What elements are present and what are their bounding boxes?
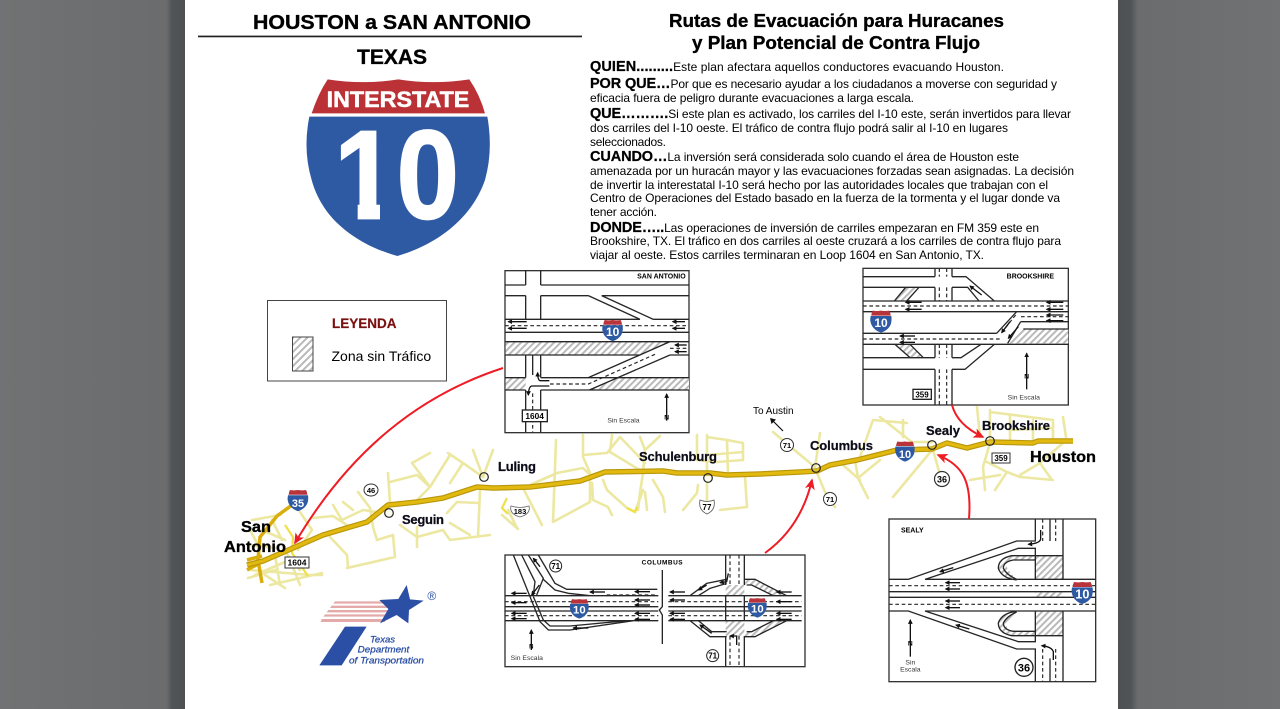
I-35 shield: [288, 490, 308, 511]
text block: quien, por que, que, cuando, donde: dos carriles del I-10 oeste. El tráfico de contra flujo podrá salir al I-10 en lugares: [590, 121, 1008, 135]
city labels: Houston: [1030, 449, 1096, 466]
city labels: Seguin: [402, 512, 444, 527]
text block: quien, por que, que, cuando, donde: CUANDO…La inversión será considerada solo cuando el área de Houston este: [590, 149, 1019, 165]
panel: Sealy detail: 36: [1018, 662, 1030, 674]
text block: quien, por que, que, cuando, donde: DONDE…..Las operaciones de inversión de carriles empezaran en FM 359 este en: [590, 220, 1039, 236]
viewer background left: [0, 0, 185, 709]
panel: San Antonio detail: N: [664, 414, 669, 421]
document page: [185, 0, 1118, 709]
logo: Texas Department of Transportation: ®: [427, 589, 436, 603]
panel: Columbus detail: 71: [551, 562, 561, 571]
city labels: Antonio: [224, 539, 286, 556]
route badges: 1604: [288, 558, 307, 568]
text block: quien, por que, que, cuando, donde: de invertir la interestatal I-10 será hecho por las autoridades locales que trabajan con el: [590, 178, 1048, 192]
city labels: Brookshire: [982, 418, 1050, 433]
arrow: to San Antonio detail: [295, 368, 503, 543]
logo: Texas Department of Transportation: Department: [358, 644, 410, 654]
city markers: [385, 437, 994, 517]
panel: Sealy detail: 10: [1075, 587, 1089, 601]
panel: San Antonio detail: 10: [606, 325, 620, 339]
panel: Sealy detail: [889, 519, 1096, 682]
city labels: Schulenburg: [639, 449, 717, 464]
panel: Columbus detail: COLUMBUS: [642, 559, 683, 566]
text block: quien, por que, que, cuando, donde: seleccionados.: [590, 135, 666, 149]
text block: quien, por que, que, cuando, donde: POR QUE…Por que es necesario ayudar a los ciudadanos a moverse con seguridad y: [590, 76, 1057, 92]
panel: San Antonio detail: Sin Escala: [607, 417, 640, 424]
to Austin label: To Austin: [753, 406, 794, 417]
route badges: 36: [937, 474, 947, 484]
I-10 shield on map: [895, 442, 915, 462]
panel: Columbus detail: Sin Escala: [511, 655, 543, 662]
heading: Rutas de Evacuacion: [669, 10, 1004, 53]
panel: San Antonio detail: SAN ANTONIO: [637, 273, 686, 280]
legend: LEYENDA: [332, 316, 397, 331]
panel: San Antonio detail: [505, 271, 689, 433]
panel: Columbus detail: 10: [573, 605, 586, 617]
panel: Sealy detail: SEALY: [901, 527, 924, 534]
text block: quien, por que, que, cuando, donde: QUIEN.........Este plan afectara aquellos conductores evacuando Houston.: [590, 59, 1004, 75]
text block: quien, por que, que, cuando, donde: tener acción.: [590, 205, 657, 219]
panel: San Antonio detail: 1604: [525, 411, 544, 421]
icon: Interstate 10 shield: 10: [334, 103, 459, 245]
route badges: 77: [703, 503, 712, 512]
legend: Zona sin Tráfico: [332, 348, 431, 364]
route badges: 359: [994, 454, 1008, 463]
side roads: [248, 407, 1066, 588]
panel: Columbus detail: N: [529, 644, 533, 650]
arrow: to Sealy detail: [938, 455, 970, 519]
heading: Rutas de Evacuacion: Rutas de Evacuación para Huracanes: [669, 10, 1004, 31]
panel: Brookshire detail: Sin Escala: [1008, 394, 1040, 401]
panel: Columbus detail: 71: [708, 652, 718, 661]
I-10 shield on map: 10: [899, 449, 911, 461]
I-35 shield: 35: [292, 498, 304, 510]
icon: Interstate 10 shield: INTERSTATE: [327, 87, 469, 112]
text block: quien, por que, que, cuando, donde: Centro de Operaciones del Estado basado en la fuerza de la tormenta y el lugar donde va: [590, 191, 1060, 205]
text block: quien, por que, que, cuando, donde: QUE……….Si este plan es activado, los carriles del I-10 este, serán invertidos para llevar: [590, 106, 1071, 122]
viewer background right: [1118, 0, 1280, 709]
heading: Houston a San Antonio: TEXAS: [357, 46, 427, 69]
heading: Rutas de Evacuacion: y Plan Potencial de Contra Flujo: [692, 32, 980, 53]
text block: quien, por que, que, cuando, donde: eficacia fuera de peligro durante evacuaciones a larga escala.: [590, 91, 914, 105]
heading: Houston a San Antonio: HOUSTON a SAN ANTONIO: [253, 12, 531, 34]
city labels: [224, 418, 1096, 556]
city labels: Sealy: [926, 423, 961, 438]
panel: Columbus detail: 10: [751, 604, 764, 616]
logo: Texas Department of Transportation: Texas: [370, 634, 395, 644]
panel: Sealy detail: N: [908, 640, 913, 647]
I-10 main route: [247, 441, 1073, 565]
city labels: Columbus: [810, 438, 873, 453]
route badges: 183: [514, 507, 526, 516]
panel: Sealy detail: Sin: [905, 660, 915, 667]
panel: Sealy detail: Escala: [900, 667, 921, 674]
panel: Brookshire detail: N: [1024, 374, 1029, 381]
panel: Columbus detail: [505, 555, 805, 667]
route badges: 71: [826, 495, 834, 504]
route badges: 46: [367, 486, 375, 495]
to Austin label: [753, 406, 794, 431]
heading: Houston a San Antonio: [198, 12, 582, 69]
icon: Interstate 10 shield: [306, 79, 490, 256]
arrow: to Brookshire detail: [952, 405, 983, 437]
legend: [268, 300, 446, 381]
panel: Brookshire detail: BROOKSHIRE: [1007, 273, 1054, 280]
route map: [224, 406, 1096, 588]
panel: Brookshire detail: 359: [915, 390, 929, 399]
city labels: Luling: [498, 459, 536, 474]
city labels: San: [241, 519, 271, 536]
logo: Texas Department of Transportation: [319, 585, 436, 665]
route badges: 71: [783, 441, 791, 450]
text block: quien, por que, que, cuando, donde: amenazada por un huracán mayor y las evacuaciones forzadas sean asignadas. La decisión: [590, 164, 1074, 178]
San Antonio freeways: [247, 505, 292, 583]
panel: Brookshire detail: [863, 268, 1068, 405]
arrow: to Columbus detail: [765, 480, 812, 553]
route badges: [285, 438, 1010, 568]
bright side roads: [285, 498, 637, 576]
panel: Brookshire detail: 10: [874, 316, 888, 330]
logo: Texas Department of Transportation: of Transportation: [349, 655, 424, 665]
text block: quien, por que, que, cuando, donde: [590, 59, 1074, 262]
text block: quien, por que, que, cuando, donde: viajar al oeste. Estos carriles terminaran en Loop 1604 en San Antonio, TX.: [590, 248, 984, 262]
text block: quien, por que, que, cuando, donde: Brookshire, TX. El tráfico en dos carriles al oeste cruzará a los carriles de contra flujo para: [590, 234, 1061, 248]
